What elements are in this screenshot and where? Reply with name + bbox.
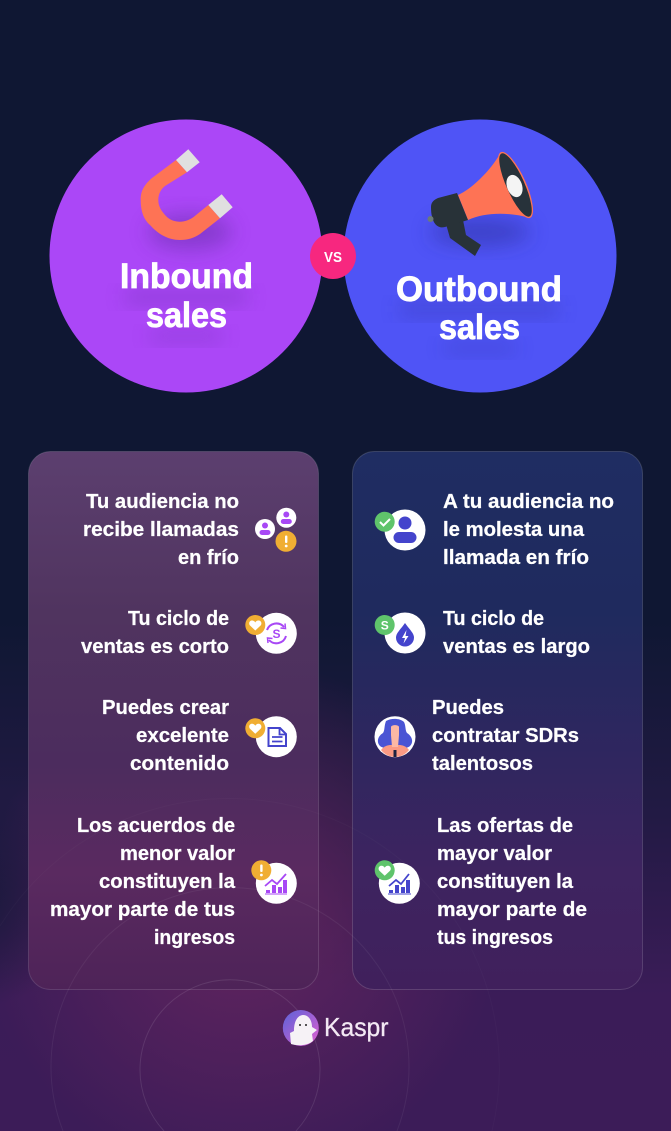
text: outbound item 1: A tu audiencia no	[443, 491, 614, 513]
heading: inbound sales: Inbound	[120, 257, 253, 296]
background rings	[0, 798, 499, 1131]
text: outbound item 4	[437, 815, 587, 949]
text: inbound item 2: Tu ciclo de	[128, 608, 229, 630]
text: outbound item 3: contratar SDRs	[432, 725, 579, 747]
icon: chart with heart	[375, 860, 420, 904]
text: outbound item 4: mayor parte de	[437, 899, 587, 921]
text: outbound item 4: tus ingresos	[437, 927, 553, 949]
logo: Kaspr: Kaspr	[324, 1012, 389, 1042]
text: inbound item 4	[50, 815, 236, 949]
text: outbound item 3	[432, 697, 579, 775]
icon: ghost	[283, 1010, 319, 1046]
text: inbound item 4: Los acuerdos de	[77, 815, 235, 837]
text: outbound item 4: mayor valor	[437, 843, 552, 865]
icon: money cycle with heart: S	[272, 627, 281, 641]
icon: woman avatar	[374, 716, 416, 757]
icon: audience with alert	[255, 508, 296, 552]
logo: Kaspr	[283, 1010, 389, 1046]
text: outbound item 4: constituyen la	[437, 871, 574, 893]
text: inbound item 2: ventas es corto	[81, 636, 229, 658]
icon: chart with alert	[251, 860, 297, 904]
text: outbound item 2: Tu ciclo de	[443, 608, 544, 630]
heading: outbound sales: Outbound	[396, 270, 562, 309]
text: outbound item 3: talentosos	[432, 753, 533, 775]
icon: person with check	[375, 510, 426, 550]
text: outbound item 1	[443, 491, 614, 569]
heading: outbound sales: sales	[439, 308, 520, 347]
text: inbound item 4: constituyen la	[99, 871, 236, 893]
panel: inbound	[28, 452, 318, 990]
icon: energy drop with money	[375, 612, 426, 654]
text: inbound item 3: contenido	[130, 753, 229, 775]
vs badge	[310, 233, 356, 279]
outbound circle	[344, 120, 616, 392]
vs badge: VS	[324, 249, 342, 266]
text: inbound item 4: menor valor	[120, 843, 235, 865]
icon: document with heart	[245, 716, 297, 757]
text: outbound item 4: Las ofertas de	[437, 815, 573, 837]
text: inbound item 4: mayor parte de tus	[50, 899, 235, 921]
text: outbound item 3: Puedes	[432, 697, 504, 719]
heading: inbound sales	[120, 257, 253, 342]
text: outbound item 2: ventas es largo	[443, 636, 590, 658]
text: inbound item 3: excelente	[136, 725, 229, 747]
text: inbound item 3	[102, 697, 229, 775]
heading: outbound sales	[396, 270, 562, 354]
text: inbound item 2	[81, 608, 229, 658]
icon: energy drop with money: S	[381, 618, 389, 632]
text: outbound item 1: llamada en frío	[443, 547, 589, 569]
inbound circle	[50, 120, 322, 392]
panel: outbound	[352, 452, 642, 990]
icon: magnet	[141, 149, 233, 250]
text: inbound item 1: Tu audiencia no	[86, 491, 239, 513]
text: inbound item 1	[83, 491, 239, 569]
text: outbound item 1: le molesta una	[443, 519, 585, 541]
text: outbound item 2	[443, 608, 590, 658]
icon: money cycle with heart	[245, 613, 297, 654]
text: inbound item 1: recibe llamadas	[83, 519, 239, 541]
text: inbound item 3: Puedes crear	[102, 697, 229, 719]
icon: megaphone	[428, 148, 540, 256]
text: inbound item 1: en frío	[178, 547, 239, 569]
text: inbound item 4: ingresos	[154, 927, 235, 949]
heading: inbound sales: sales	[146, 296, 227, 335]
